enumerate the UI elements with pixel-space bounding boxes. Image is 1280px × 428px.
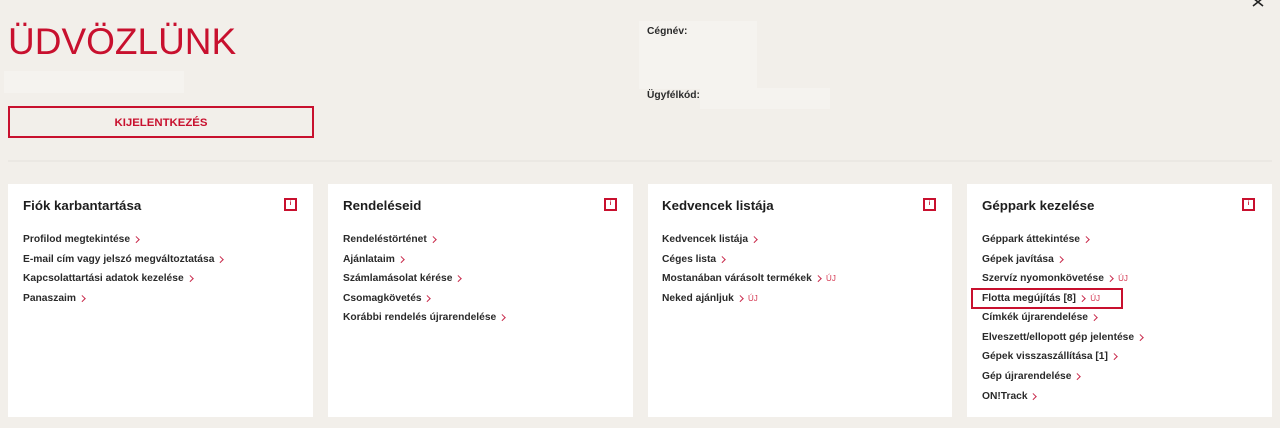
link: quotes: Ajánlataim [343,254,395,265]
icon: info: i [929,201,930,207]
icon: info: i [290,201,291,207]
link: tool repair: Gépek javítása [982,254,1054,265]
highlight box [971,288,1123,309]
panel: orders [328,184,633,417]
link: service tracking: Szervíz nyomonkövetése ÚJ [982,273,1128,284]
link: complaints: Panaszaim [23,293,76,304]
heading: favourites: Kedvencek listája [662,198,774,213]
link: fleet overview: Géppark áttekintése [982,234,1080,245]
link: report lost or stolen tool: Elveszett/ellopott gép jelentése [982,332,1134,343]
link: recommended: Neked ajánljuk ÚJ [662,293,758,304]
link: recently purchased: Mostanában várásolt termékek ÚJ [662,273,836,284]
link: request invoice copy: Számlamásolat kérése [343,273,452,284]
redacted customer code [700,88,830,109]
icon: info [923,198,936,211]
icon: info [284,198,297,211]
link: order history: Rendeléstörténet [343,234,427,245]
link: view profile: Profilod megtekintése [23,234,130,245]
heading: fleet management: Géppark kezelése [982,198,1094,213]
customer code label: Ügyfélkód: [647,90,700,101]
panel: favourites [648,184,952,417]
icon: info [604,198,617,211]
logout button [8,106,314,138]
logout button: KIJELENTKEZÉS [114,117,208,129]
icon: info: i [610,201,611,207]
heading: orders: Rendeléseid [343,198,421,213]
link: manage contact details: Kapcsolattartási adatok kezelése [23,273,184,284]
link: parcel tracking: Csomagkövetés [343,293,422,304]
link: ON!Track: ON!Track [982,391,1028,402]
link: reorder tool: Gép újrarendelése [982,371,1071,382]
link: reorder previous order: Korábbi rendelés újrarendelése [343,312,496,323]
panel: account maintenance [8,184,313,417]
link: company list: Céges lista [662,254,716,265]
company name label: Cégnév: [647,26,687,37]
link: change email or password: E-mail cím vagy jelszó megváltoztatása [23,254,214,265]
link: return tools: Gépek visszaszállítása [1] [982,351,1108,362]
icon: info [1242,198,1255,211]
title: ÜDVÖZLÜNK [8,21,236,62]
link: favourites list: Kedvencek listája [662,234,748,245]
divider [8,160,1272,162]
close icon [1252,0,1264,7]
redacted user name [4,71,184,93]
link: fleet renewal: Flotta megújítás [8] ÚJ [982,293,1100,304]
icon: info: i [1248,201,1249,207]
redacted company name [639,21,757,89]
link: reorder labels: Címkék újrarendelése [982,312,1088,323]
heading: account maintenance: Fiók karbantartása [23,198,141,213]
panel: fleet management [967,184,1272,417]
